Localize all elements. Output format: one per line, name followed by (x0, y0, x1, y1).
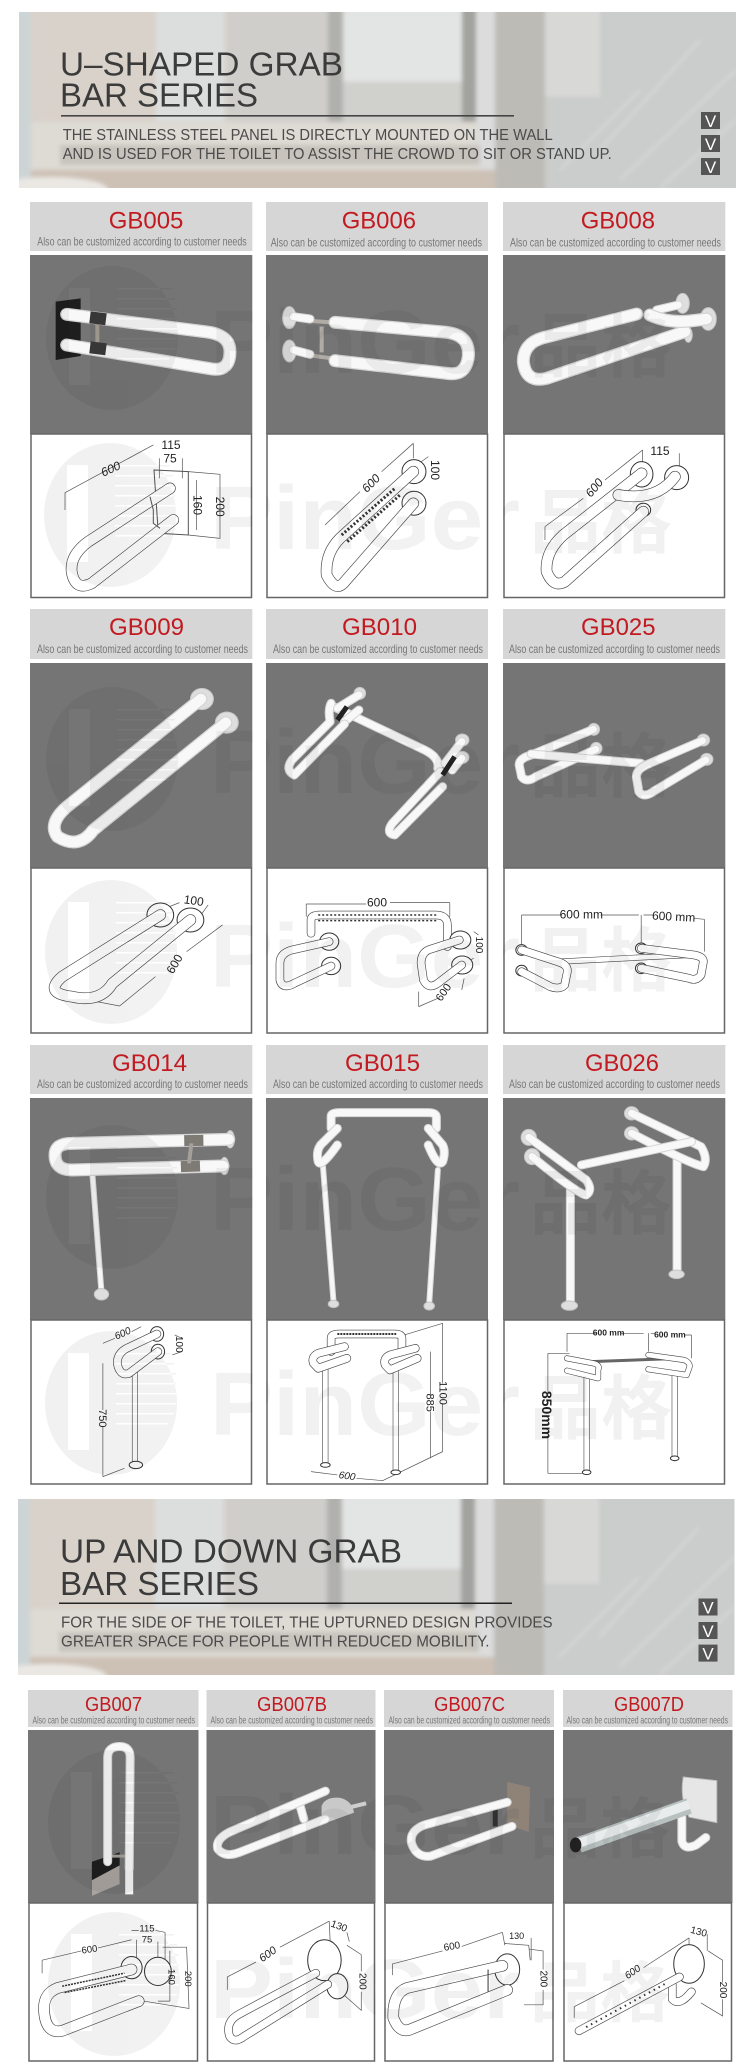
drawing GB010 (267, 868, 488, 1033)
drawing GB007: 600 (81, 1943, 98, 1957)
icon: chevron boxes: V (702, 1598, 714, 1618)
watermark: row 2: PinGer (210, 713, 520, 813)
card: GB015 (266, 1045, 488, 1484)
photo GB007C (384, 1730, 554, 1903)
photo GB007D (563, 1730, 732, 1903)
watermark: row 3: 品格 (530, 1165, 672, 1243)
drawing GB007: 115 (139, 1924, 155, 1934)
drawing GB007D: 130 (689, 1925, 709, 1940)
watermark: row 2: 品格 (530, 728, 672, 806)
header GB007C: GB007C (434, 1693, 505, 1716)
banner title (60, 46, 343, 114)
banner title: BAR SERIES (60, 77, 258, 114)
photo GB009 (30, 663, 252, 868)
drawing GB007C: 130 (509, 1931, 524, 1941)
header GB025: GB025 (581, 614, 656, 641)
card: GB007 (28, 1690, 198, 2061)
watermark: row 2: 品格 (530, 922, 672, 1000)
drawing GB015 (267, 1320, 488, 1484)
drawing GB007C: 200 (538, 1970, 548, 1988)
banner title: UP AND DOWN GRAB (60, 1532, 402, 1570)
drawing GB007B: 200 (356, 1973, 368, 1990)
icon: chevron boxes: V (702, 1645, 714, 1664)
header GB007: GB007 (85, 1693, 142, 1716)
watermark: row 1: 品格 (530, 484, 672, 562)
watermark: row 4: 品格 (530, 1792, 670, 1866)
drawing GB026: 600 mm (593, 1328, 625, 1338)
drawing GB006 (267, 434, 488, 598)
drawing GB007D: 600 (623, 1963, 643, 1982)
card: GB014 (30, 1045, 252, 1484)
drawing GB009: 100 (183, 892, 205, 909)
watermark: row 4: 品格 (530, 1956, 670, 2030)
drawing GB009: 600 (164, 952, 186, 976)
header GB009: GB009 (109, 614, 184, 641)
drawing GB008: 115 (650, 444, 670, 458)
banner description: GREATER SPACE FOR PEOPLE WITH REDUCED MOBILITY. (61, 1634, 490, 1650)
drawing GB005: 600 (99, 458, 123, 480)
icon: chevron boxes (698, 1598, 718, 1664)
drawing GB007D (564, 1903, 732, 2061)
header GB009: Also can be customized according to customer needs (37, 642, 248, 656)
drawing GB025: 600 mm (560, 907, 603, 921)
drawing GB007: 160 (165, 1969, 176, 1985)
banner title: U–SHAPED GRAB (60, 46, 343, 83)
card: GB005 (30, 202, 252, 598)
card: GB007D (563, 1690, 732, 2061)
drawing GB007 (29, 1903, 198, 2061)
header GB015: GB015 (345, 1050, 420, 1077)
header GB007B: Also can be customized according to customer needs (210, 1716, 373, 1726)
banner description (61, 1614, 553, 1650)
header GB010 (266, 609, 488, 659)
photo GB010 (266, 663, 488, 868)
banner title: BAR SERIES (60, 1565, 259, 1602)
header GB007D (563, 1690, 732, 1727)
drawing GB015: 885 (424, 1394, 436, 1412)
card: GB025 (503, 609, 725, 1033)
drawing GB008 (504, 434, 724, 598)
header GB025 (503, 609, 725, 659)
header GB015 (266, 1045, 488, 1094)
watermark: row 1 (44, 308, 670, 587)
drawing GB015: 600 (338, 1470, 356, 1483)
drawing GB007B: 130 (329, 1919, 349, 1935)
watermark: row 4: PinGer (210, 1942, 520, 2036)
watermark: row 3 (45, 1125, 672, 1475)
card: GB026 (503, 1045, 725, 1484)
drawing GB010: 600 (367, 896, 387, 910)
header GB015: Also can be customized according to customer needs (273, 1077, 483, 1091)
banner description: THE STAINLESS STEEL PANEL IS DIRECTLY MOUNTED ON THE WALL (63, 127, 553, 144)
card: GB007C (384, 1690, 554, 2061)
header GB009 (30, 609, 252, 659)
photo GB025 (503, 663, 725, 868)
header GB005 (30, 202, 252, 251)
icon: chevron boxes (701, 112, 720, 177)
icon: chevron boxes: V (705, 158, 717, 177)
header GB008: GB008 (581, 207, 655, 234)
photo GB014 (30, 1098, 252, 1320)
header GB005: Also can be customized according to customer needs (37, 235, 247, 249)
banner background photo: bathroom (19, 12, 736, 188)
header GB006 (266, 202, 488, 251)
banner description (63, 127, 612, 163)
header GB026 (503, 1045, 725, 1094)
drawing GB006: 100 (428, 460, 442, 480)
drawing GB007B (208, 1903, 374, 2061)
header GB007 (28, 1690, 198, 1727)
photo GB008 (503, 255, 725, 434)
drawing GB005: 160 (191, 495, 205, 515)
drawing GB005: 75 (163, 452, 177, 466)
photo GB007 (28, 1730, 198, 1903)
drawing GB007: 200 (182, 1971, 193, 1987)
card: GB010 (266, 609, 488, 1033)
header GB026: GB026 (585, 1050, 659, 1077)
header GB014 (30, 1045, 252, 1094)
watermark: row 2 (45, 687, 672, 1024)
banner description: FOR THE SIDE OF THE TOILET, THE UPTURNED DESIGN PROVIDES (61, 1614, 553, 1632)
header GB007B (206, 1690, 376, 1727)
drawing GB007: 75 (142, 1934, 152, 1946)
watermark: row 3: 品格 (530, 1370, 672, 1448)
header GB010: Also can be customized according to customer needs (273, 642, 483, 656)
header GB007C (384, 1690, 554, 1727)
drawing GB005: 115 (161, 438, 181, 452)
watermark: row 1: 品格 (530, 308, 672, 386)
photo GB007B (206, 1730, 376, 1903)
header GB007D: GB007D (614, 1693, 684, 1716)
drawing GB025 (504, 868, 724, 1033)
drawing GB007C: 600 (443, 1940, 462, 1954)
banner background photo: bathroom (18, 1499, 734, 1675)
photo GB005 (30, 255, 252, 434)
photo GB026 (503, 1098, 725, 1320)
drawing GB007C (385, 1903, 553, 2061)
drawing GB007B: 600 (257, 1944, 280, 1965)
drawing GB026: 600 mm (654, 1329, 686, 1339)
drawing GB009 (31, 868, 252, 1033)
header GB007C: Also can be customized according to customer needs (388, 1716, 550, 1726)
watermark: row 4: PinGer (210, 1778, 520, 1872)
drawing GB014: 100 (173, 1336, 184, 1353)
drawing GB014 (31, 1320, 252, 1484)
drawing GB014: 750 (96, 1409, 108, 1427)
card: GB009 (30, 609, 252, 1033)
watermark: row 1: PinGer (210, 469, 520, 569)
card: GB008 (503, 202, 725, 598)
drawing GB026 (504, 1320, 724, 1484)
drawing GB005: 200 (213, 497, 227, 517)
drawing GB007D: 200 (717, 1982, 728, 1999)
header GB007B: GB007B (257, 1693, 327, 1716)
drawing GB006: 600 (359, 471, 383, 495)
card: GB006 (266, 202, 488, 598)
photo GB015 (266, 1098, 488, 1320)
header GB010: GB010 (342, 614, 417, 641)
drawing GB025: 600 mm (652, 909, 696, 925)
watermark: row 3: PinGer (210, 1150, 520, 1250)
banner title (60, 1532, 402, 1602)
card: GB007B (206, 1690, 376, 2061)
header GB006: Also can be customized according to customer needs (271, 236, 482, 250)
drawing GB008: 600 (582, 475, 606, 500)
photo GB006 (266, 255, 488, 434)
watermark: row 3: PinGer (210, 1355, 520, 1455)
drawing GB010: 600 (434, 982, 454, 1004)
drawing GB015: 1100 (437, 1381, 449, 1405)
header GB005: GB005 (109, 207, 183, 234)
drawing GB005 (31, 434, 252, 598)
drawing GB014: 600 (113, 1325, 133, 1343)
banner: U-shaped grab bar series (19, 12, 736, 188)
icon: chevron boxes: V (702, 1622, 714, 1641)
banner: up and down grab bar series (18, 1499, 734, 1675)
header GB007: Also can be customized according to customer needs (32, 1716, 195, 1726)
header GB008 (503, 202, 725, 251)
drawing GB026: 850mm (539, 1391, 555, 1439)
header GB014: GB014 (112, 1050, 187, 1077)
header GB014: Also can be customized according to customer needs (37, 1077, 248, 1091)
header GB006: GB006 (342, 207, 416, 234)
drawing GB010: 100 (473, 937, 484, 954)
icon: chevron boxes: V (705, 112, 717, 131)
watermark: row 1: PinGer (210, 293, 520, 393)
icon: chevron boxes: V (705, 135, 717, 154)
watermark: row 4 (48, 1750, 670, 2056)
watermark: row 2: PinGer (210, 907, 520, 1007)
banner description: AND IS USED FOR THE TOILET TO ASSIST THE CROWD TO SIT OR STAND UP. (63, 146, 612, 163)
